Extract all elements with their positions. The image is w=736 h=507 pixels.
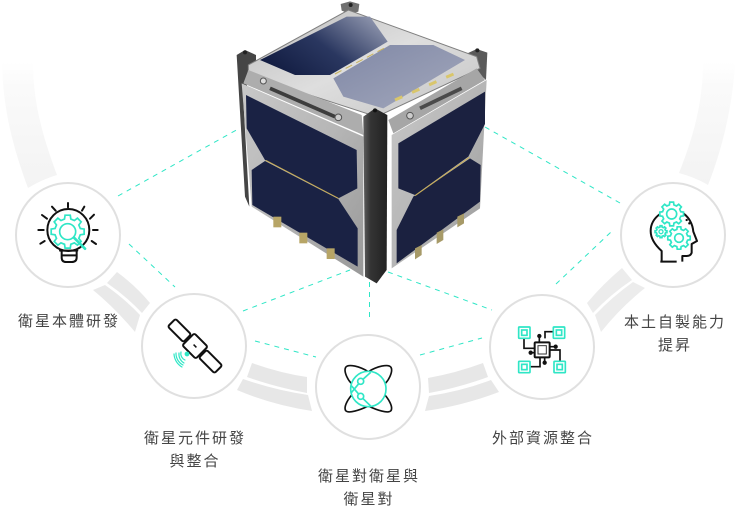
label: components line 2: 與整合 bbox=[169, 453, 221, 470]
decorative ring: top-right band bbox=[679, 62, 735, 185]
label: components: 衛星元件研發 bbox=[144, 430, 246, 447]
circle: components bbox=[142, 294, 246, 398]
left solar panel bbox=[242, 83, 363, 277]
icon: head with gears bbox=[651, 202, 697, 262]
icon: light bulb with gear bbox=[38, 203, 98, 262]
front corner post bbox=[363, 108, 387, 283]
icon: orbit bbox=[345, 366, 392, 412]
right solar panel bbox=[392, 80, 487, 268]
label: sat-to-sat: 衛星對衛星與 bbox=[318, 468, 420, 485]
circle: external resources bbox=[490, 295, 594, 399]
dashed connectors bbox=[118, 127, 620, 357]
label: external resources: 外部資源整合 bbox=[492, 430, 594, 447]
label: satellite body R&D: 衛星本體研發 bbox=[18, 313, 120, 330]
decorative ring: lower-right band bbox=[425, 363, 499, 411]
icon: chip network bbox=[519, 327, 565, 373]
icon: signal waves bbox=[174, 352, 189, 367]
decorative ring: lower-left band bbox=[237, 363, 312, 411]
label: indigenous capability: 本土自製能力 bbox=[624, 314, 726, 331]
circle: indigenous capability bbox=[621, 183, 725, 287]
circle: sat-to-sat bbox=[316, 335, 420, 439]
icon: satellite bbox=[166, 317, 224, 375]
decorative ring: top-left band bbox=[2, 62, 57, 188]
top plate bbox=[243, 10, 485, 135]
label: indigenous capability line 2: 提昇 bbox=[658, 337, 692, 354]
satellite cube bbox=[237, 1, 487, 283]
decorative ring: left band bbox=[93, 272, 150, 332]
corner posts bbox=[237, 1, 487, 207]
circle: satellite body R&D bbox=[16, 183, 120, 287]
decorative ring: right band bbox=[587, 268, 645, 332]
